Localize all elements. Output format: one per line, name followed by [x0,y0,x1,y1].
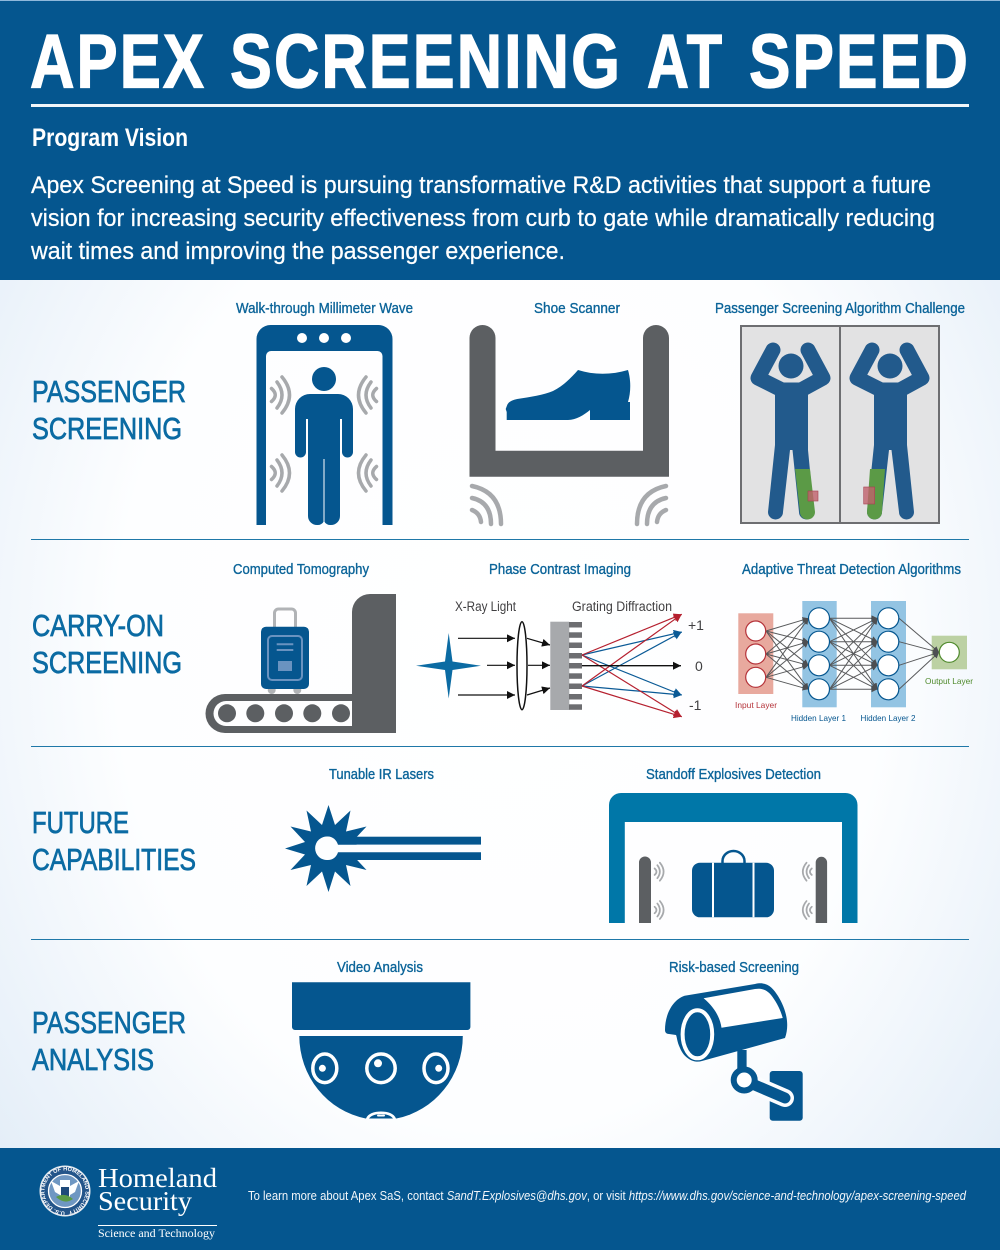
icon: sensor posts [639,856,827,923]
labels: layers: Hidden Layer 2 [860,713,916,723]
header band [0,0,1000,280]
logo: wordmark: Homeland [98,1163,218,1193]
logo: wordmark [98,1163,218,1240]
nodes [746,608,959,700]
vision statement: wait times and improving the passenger experience. [30,238,565,265]
section heading: future capabilities [32,805,196,877]
labels: layers: Input Layer [735,700,777,710]
panels: network layers [738,601,967,707]
labels: layers: Hidden Layer 1 [791,713,846,723]
item: passenger screening algorithm challenge [715,300,965,523]
item: tunable ir lasers: Tunable IR Lasers [329,766,434,783]
item: walk-through millimeter wave [236,300,413,525]
section heading: carry-on screening [32,608,182,680]
section heading: passenger screening: PASSENGER [32,374,186,409]
labels: layers [735,676,973,723]
logo: wordmark: Security [98,1186,193,1216]
item: video analysis: Video Analysis [337,959,423,976]
contact line: To learn more about Apex SaS, contact SandT.Explosives@dhs.gov, or visit https://www.dhs.gov/science-and-technology/apex-screening-speed [248,1189,967,1203]
icon: grating [550,622,582,710]
item: shoe scanner [470,300,669,524]
section heading: future capabilities: FUTURE [32,805,129,840]
icon: standoff gantry [609,793,858,923]
icon: lens [517,622,527,710]
icon: laser burst [285,805,481,892]
icon: scanner frame [470,325,669,477]
item: computed tomography: Computed Tomography [233,561,369,578]
label: x-ray light: X-Ray Light [455,599,516,614]
icon: suitcase [261,609,309,694]
connections [766,618,939,689]
title [30,20,970,104]
footer band [0,1148,1000,1250]
logo: wordmark: Science and Technology [98,1228,215,1240]
title: SCREENING [230,20,622,104]
vision statement: vision for increasing security effectiveness from curb to gate while dramatically reducing [31,205,935,232]
vision statement: Apex Screening at Speed is pursuing transformative R&D activities that support a future [31,172,931,199]
item: computed tomography [206,561,396,733]
item: phase contrast imaging: Phase Contrast Imaging [489,561,631,578]
item: risk-based screening: Risk-based Screening [669,959,799,976]
subheading: program vision: Program Vision [32,124,188,152]
figure: right scan [857,350,922,520]
page background [0,280,1000,1150]
item: adaptive threat detection algorithms [735,561,973,723]
section heading: carry-on screening: CARRY-ON [32,608,164,643]
label: grating diffraction: Grating Diffraction [572,599,672,614]
panel: body scans [741,326,939,523]
item: standoff explosives detection: Standoff Explosives Detection [646,766,821,783]
item: passenger screening algorithm challenge: Passenger Screening Algorithm Challenge [715,300,965,317]
section heading: passenger analysis: ANALYSIS [32,1042,154,1077]
labels: orders: -1 [689,697,702,713]
icon: security camera [665,983,803,1121]
item: adaptive threat detection algorithms: Adaptive Threat Detection Algorithms [742,561,961,578]
section heading: passenger screening: SCREENING [32,411,182,446]
labels: orders [688,617,704,713]
arrows: incoming rays [458,638,550,695]
icon: light source star [416,633,481,698]
item: phase contrast imaging [416,561,704,717]
title: AT [647,20,724,104]
vision statement [30,172,935,265]
figure: left scan [758,350,823,520]
labels: layers: Output Layer [925,676,973,686]
labels: orders: +1 [688,617,704,633]
item: shoe scanner: Shoe Scanner [534,300,620,317]
section heading: future capabilities: CAPABILITIES [32,842,196,877]
item: video analysis [292,959,470,1118]
logo: dhs seal: U.S. DEPARTMENT OF HOMELAND SECURITY [40,1167,89,1216]
arrows: diffraction orders [582,614,682,717]
section heading: passenger analysis: PASSENGER [32,1005,186,1040]
section heading: carry-on screening: SCREENING [32,645,182,680]
item: walk-through millimeter wave: Walk-through Millimeter Wave [236,300,413,317]
item: standoff explosives detection [609,766,858,923]
title: APEX [30,20,206,104]
section heading: passenger analysis [32,1005,186,1077]
icon: dome camera [292,982,470,1118]
labels: orders: 0 [695,658,703,674]
item: tunable ir lasers [285,766,481,892]
icon: scanner portal [256,325,392,525]
item: risk-based screening [665,959,803,1121]
icon: luggage [692,851,774,917]
icon: shoe [506,370,630,420]
section heading: passenger screening [32,374,186,446]
icon: conveyor machine [206,594,396,733]
